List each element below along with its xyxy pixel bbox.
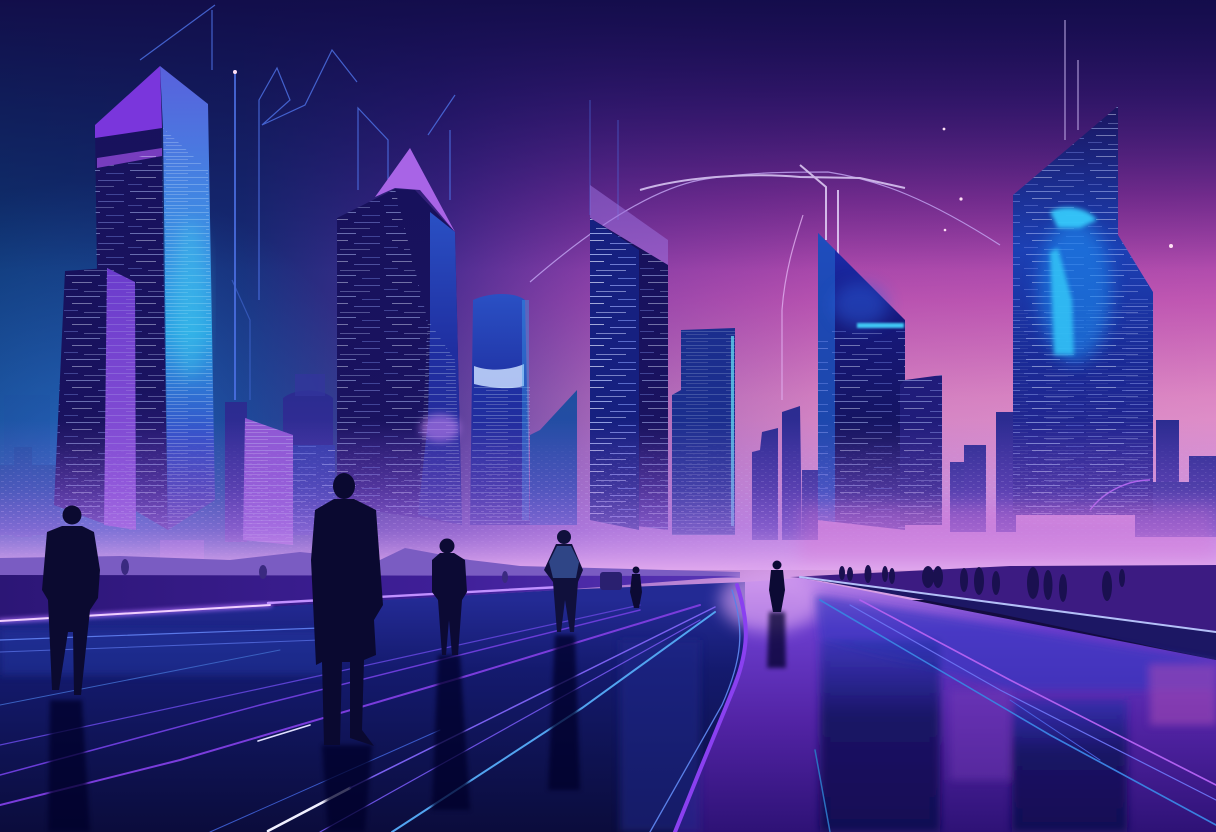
building: mid tower (672, 328, 735, 535)
pink glow at right horizon (800, 505, 1216, 560)
horizon haze (0, 420, 1216, 570)
person: silhouette in mid-ground (432, 538, 467, 655)
person: small figure on road (630, 566, 642, 608)
distant skyline (0, 374, 1216, 565)
person: large foreground silhouette in coat (311, 473, 383, 746)
building: angular tower with pink top (337, 148, 462, 525)
building: pink block (243, 418, 335, 545)
ground plain, right (790, 565, 1216, 632)
ground plain, left (0, 575, 740, 622)
road, left half (0, 582, 746, 832)
building: tall prism, left (95, 66, 215, 530)
sky sparkles (233, 70, 1173, 248)
city window speckle (1, 454, 1214, 542)
building: slanted tower, right of centre (818, 233, 905, 530)
building: short tower, far left (54, 268, 136, 530)
road, right half (675, 578, 1216, 832)
person: silhouette with light shirt (544, 530, 583, 632)
building: short tower beside slanted tower (900, 375, 942, 525)
distant land strip (0, 548, 740, 578)
building: central tall tower (590, 185, 668, 530)
light traces in the sky (140, 5, 1078, 400)
road reflections (0, 595, 1216, 832)
sky background (0, 0, 1216, 600)
crowd along the right barrier (121, 559, 1125, 602)
glowing road lines (0, 577, 1216, 832)
person: distant walker (769, 560, 785, 612)
building: large tower, right (1013, 106, 1153, 515)
barrier wall, right (800, 577, 1216, 660)
glow at road vanishing point (720, 568, 820, 632)
building: small cyan tower (470, 294, 530, 525)
person: far-left silhouette (42, 506, 100, 695)
figure reflections (48, 612, 786, 832)
